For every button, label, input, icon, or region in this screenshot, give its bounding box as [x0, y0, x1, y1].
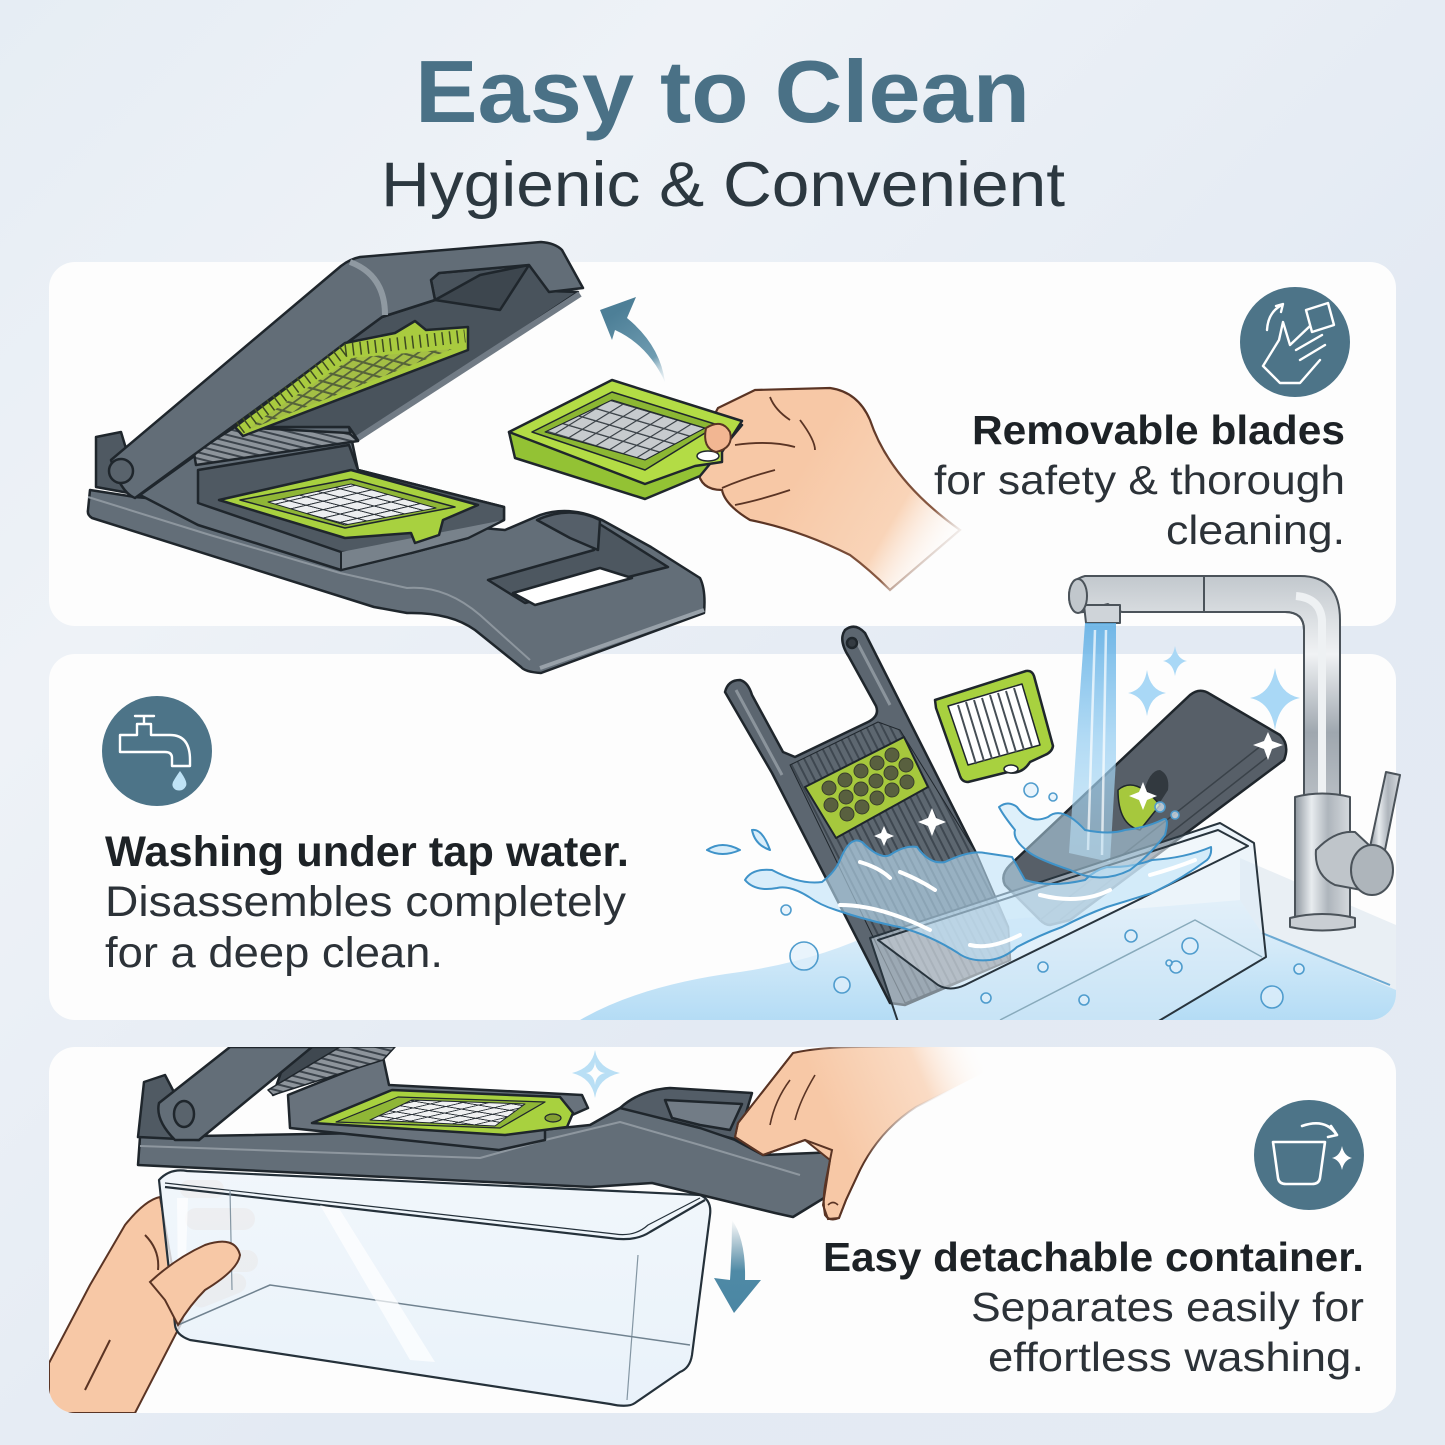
text: washing under tap water: Disassembles completely [105, 878, 627, 926]
illustration: grater plate [725, 627, 1010, 1005]
sink counter [580, 858, 1396, 1020]
text: removable blades [934, 407, 1345, 553]
text: easy detachable container: Easy detachable container. [823, 1234, 1364, 1280]
panel: detachable container [49, 1047, 1396, 1413]
pale fingers behind container [180, 1180, 258, 1311]
arrow: lift blade [600, 297, 665, 382]
sparkle above chopper [572, 1050, 620, 1098]
illustration: open chopper [88, 242, 705, 673]
icon: hand removing blade [1240, 287, 1350, 397]
removable blade [509, 380, 742, 499]
text: washing under tap water: for a deep clean. [105, 929, 443, 977]
thumb [150, 1242, 240, 1325]
arrow: container down [714, 1220, 761, 1313]
dark slicer body [1003, 691, 1286, 925]
hand holding blade [698, 388, 960, 590]
water stream [1069, 623, 1116, 862]
right hand gripping handle [735, 1047, 985, 1219]
text: removable blades: cleaning. [1166, 507, 1345, 553]
text: removable blades: for safety & thorough [934, 457, 1345, 503]
panel: washing under tap water [49, 654, 1396, 1020]
green hole plate [805, 737, 928, 838]
icon: tap with water drop [102, 696, 212, 806]
sparkles [1128, 646, 1300, 730]
thumb on blade [705, 424, 731, 452]
illustration: chopper on container [49, 1047, 985, 1413]
text: washing under tap water [105, 828, 629, 977]
title: Easy to Clean [415, 42, 1030, 141]
small glints [874, 732, 1283, 846]
panel: removable blades [49, 262, 1396, 626]
text: easy detachable container: effortless washing. [988, 1334, 1364, 1380]
glass container [159, 1170, 710, 1406]
text: easy detachable container: Separates easily for [971, 1284, 1364, 1330]
lid blade [235, 321, 468, 436]
subtitle: Hygienic & Convenient [381, 150, 1066, 220]
detached slicing blade [935, 671, 1053, 782]
text: washing under tap water: Washing under tap water. [105, 828, 629, 876]
green blade on chopper [312, 1090, 573, 1135]
splash highlights [840, 860, 1195, 946]
water splash [707, 804, 1211, 960]
text: easy detachable container [823, 1234, 1364, 1380]
illustration: faucet [1069, 576, 1400, 930]
left hand behind container [49, 1197, 183, 1413]
text: removable blades: Removable blades [972, 407, 1345, 453]
transparent box in sink [870, 823, 1266, 1025]
lower green blade frame [219, 470, 478, 543]
chopper body with lid [138, 1047, 842, 1217]
bubbles [781, 783, 1304, 1008]
icon: container with sparkle [1254, 1100, 1364, 1210]
